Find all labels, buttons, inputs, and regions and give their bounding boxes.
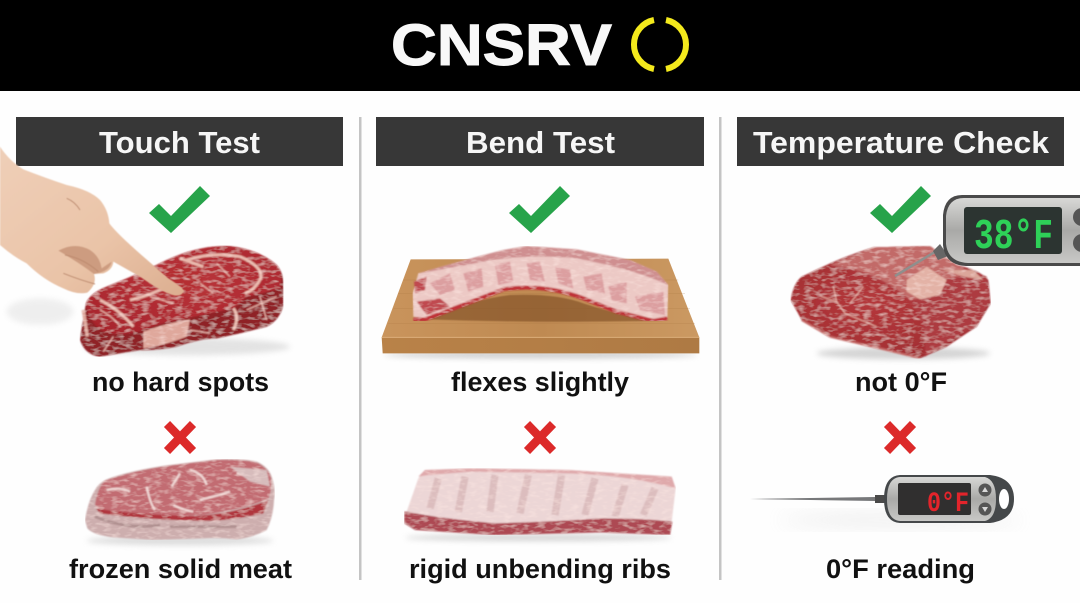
cutting board bbox=[382, 259, 699, 337]
column dividers bbox=[359, 117, 362, 580]
thermometer: 38°F reading: 38°F bbox=[974, 212, 1053, 261]
caption: not 0°F: not 0°F bbox=[855, 367, 947, 397]
thermometer: 0°F reading bbox=[750, 475, 1020, 524]
icon: red cross bbox=[527, 424, 553, 451]
heading: bend test bbox=[376, 117, 704, 166]
caption: no hard spots: no hard spots bbox=[92, 367, 269, 397]
logo wordmark: CNSRV bbox=[391, 13, 612, 78]
icon: red cross bbox=[167, 424, 193, 451]
hand bbox=[0, 147, 184, 296]
icon: green check bbox=[149, 186, 210, 233]
panel: touch test bbox=[0, 117, 343, 584]
thermometer: 0°F reading: 0°F bbox=[927, 489, 969, 520]
heading: touch test bbox=[16, 117, 343, 166]
steak with finger press bbox=[0, 147, 290, 357]
caption: 0°F reading: 0°F reading bbox=[826, 554, 975, 584]
panel: temperature check bbox=[737, 117, 1080, 584]
logo icon: yellow brackets bbox=[634, 20, 686, 69]
roast bbox=[791, 246, 991, 359]
header band bbox=[0, 0, 1080, 91]
panel: bend test bbox=[376, 117, 704, 584]
icon: green check bbox=[870, 186, 931, 233]
heading: temperature check bbox=[737, 117, 1064, 166]
icon: red cross bbox=[887, 424, 913, 451]
caption: rigid unbending ribs: rigid unbending ribs bbox=[409, 554, 671, 584]
rigid frozen ribs bbox=[404, 468, 676, 541]
heading: touch test: Touch Test bbox=[99, 125, 260, 160]
heading: bend test: Bend Test bbox=[466, 125, 615, 160]
caption: flexes slightly: flexes slightly bbox=[451, 367, 629, 397]
caption: frozen solid meat: frozen solid meat bbox=[69, 554, 292, 584]
icon: green check bbox=[509, 186, 570, 233]
thermometer: 38°F reading bbox=[895, 195, 1080, 276]
frozen steak bbox=[85, 459, 275, 545]
heading: temperature check: Temperature Check bbox=[753, 125, 1050, 160]
flexing ribs on cutting board bbox=[382, 246, 699, 358]
